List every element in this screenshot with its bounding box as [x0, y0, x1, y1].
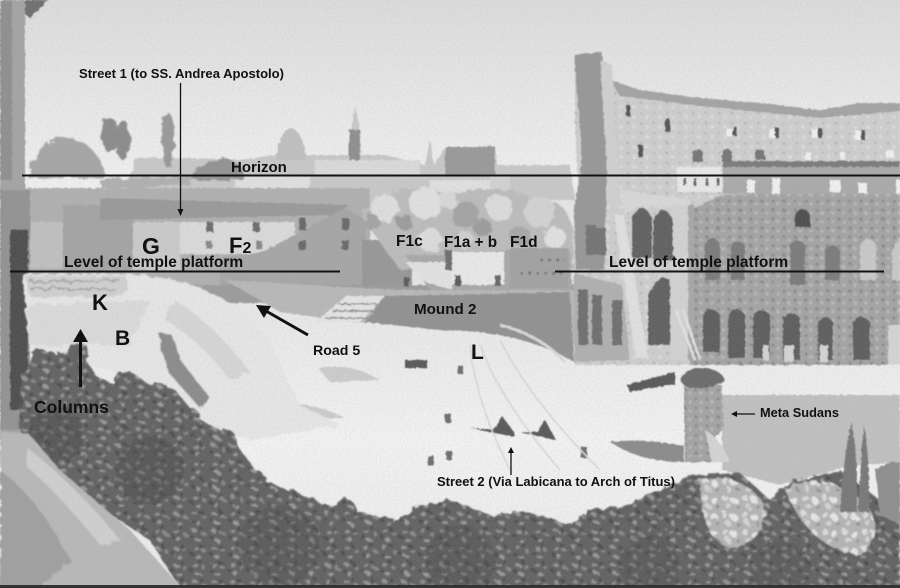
Colosseum — [572, 52, 900, 365]
white building in ruin — [677, 167, 722, 192]
upper ruined wall — [572, 52, 900, 365]
label: mound 2: Mound 2 — [414, 301, 476, 318]
foreground trees, bottom right — [385, 470, 900, 588]
road, steps and mound 2 — [225, 280, 575, 362]
arrow: columns — [73, 329, 88, 387]
label: B: B — [115, 327, 130, 350]
horizon line — [22, 174, 900, 176]
arrow: Meta Sudans — [731, 411, 755, 417]
level line, left — [10, 270, 340, 272]
bottom edge — [0, 585, 900, 588]
sky — [0, 0, 900, 190]
pale pier band — [620, 190, 690, 215]
level line, right — [555, 270, 884, 272]
label: Meta Sudans: Meta Sudans — [760, 405, 839, 420]
distant city skyline — [130, 105, 575, 206]
large arches — [632, 208, 673, 345]
label: level of temple platform, left: Level of temple platform — [64, 254, 243, 271]
brick middle tier — [690, 190, 900, 365]
left hill — [22, 274, 340, 440]
brick arches, middle row — [705, 238, 840, 285]
top row windows — [626, 105, 865, 157]
scaffold poles — [676, 310, 700, 360]
Meta Sudans ruin — [680, 368, 730, 462]
brick arches, lower row — [703, 309, 870, 360]
label: F1d: F1d — [510, 234, 538, 251]
label: F2: F2 — [229, 233, 251, 258]
arrow: street 2 — [508, 447, 514, 475]
label: F1c: F1c — [396, 233, 423, 250]
foreground carts on ground — [272, 340, 900, 485]
label: street 1: Street 1 (to SS. Andrea Apostolo) — [79, 66, 284, 81]
label: horizon: Horizon — [231, 159, 287, 176]
cypress trees — [840, 422, 900, 525]
tree clump behind F1 buildings — [360, 187, 575, 270]
left arcade — [574, 273, 630, 362]
label: L: L — [471, 341, 484, 364]
label: F1a + b: F1a + b — [444, 234, 497, 251]
label: level of temple platform, right: Level of temple platform — [609, 254, 788, 271]
small arched openings — [693, 149, 765, 162]
broken end tower — [574, 52, 608, 270]
label: columns: Columns — [34, 397, 109, 417]
F1 buildings — [404, 248, 572, 290]
label: street 2: Street 2 (Via Labicana to Arch of Titus) — [437, 474, 675, 489]
label: G: G — [142, 233, 160, 259]
foreground rock, bottom left — [0, 430, 182, 588]
label: road 5: Road 5 — [313, 343, 360, 359]
label: K: K — [92, 290, 108, 315]
distant trees — [28, 112, 245, 190]
ground — [0, 290, 900, 588]
arrow: street 1 — [178, 83, 184, 216]
foreground trees, left — [20, 343, 395, 588]
left stone pillar — [0, 0, 48, 440]
middle buildings — [25, 188, 575, 303]
arrow: road 5 — [256, 305, 308, 335]
tree tops along the left edge — [31, 343, 356, 521]
